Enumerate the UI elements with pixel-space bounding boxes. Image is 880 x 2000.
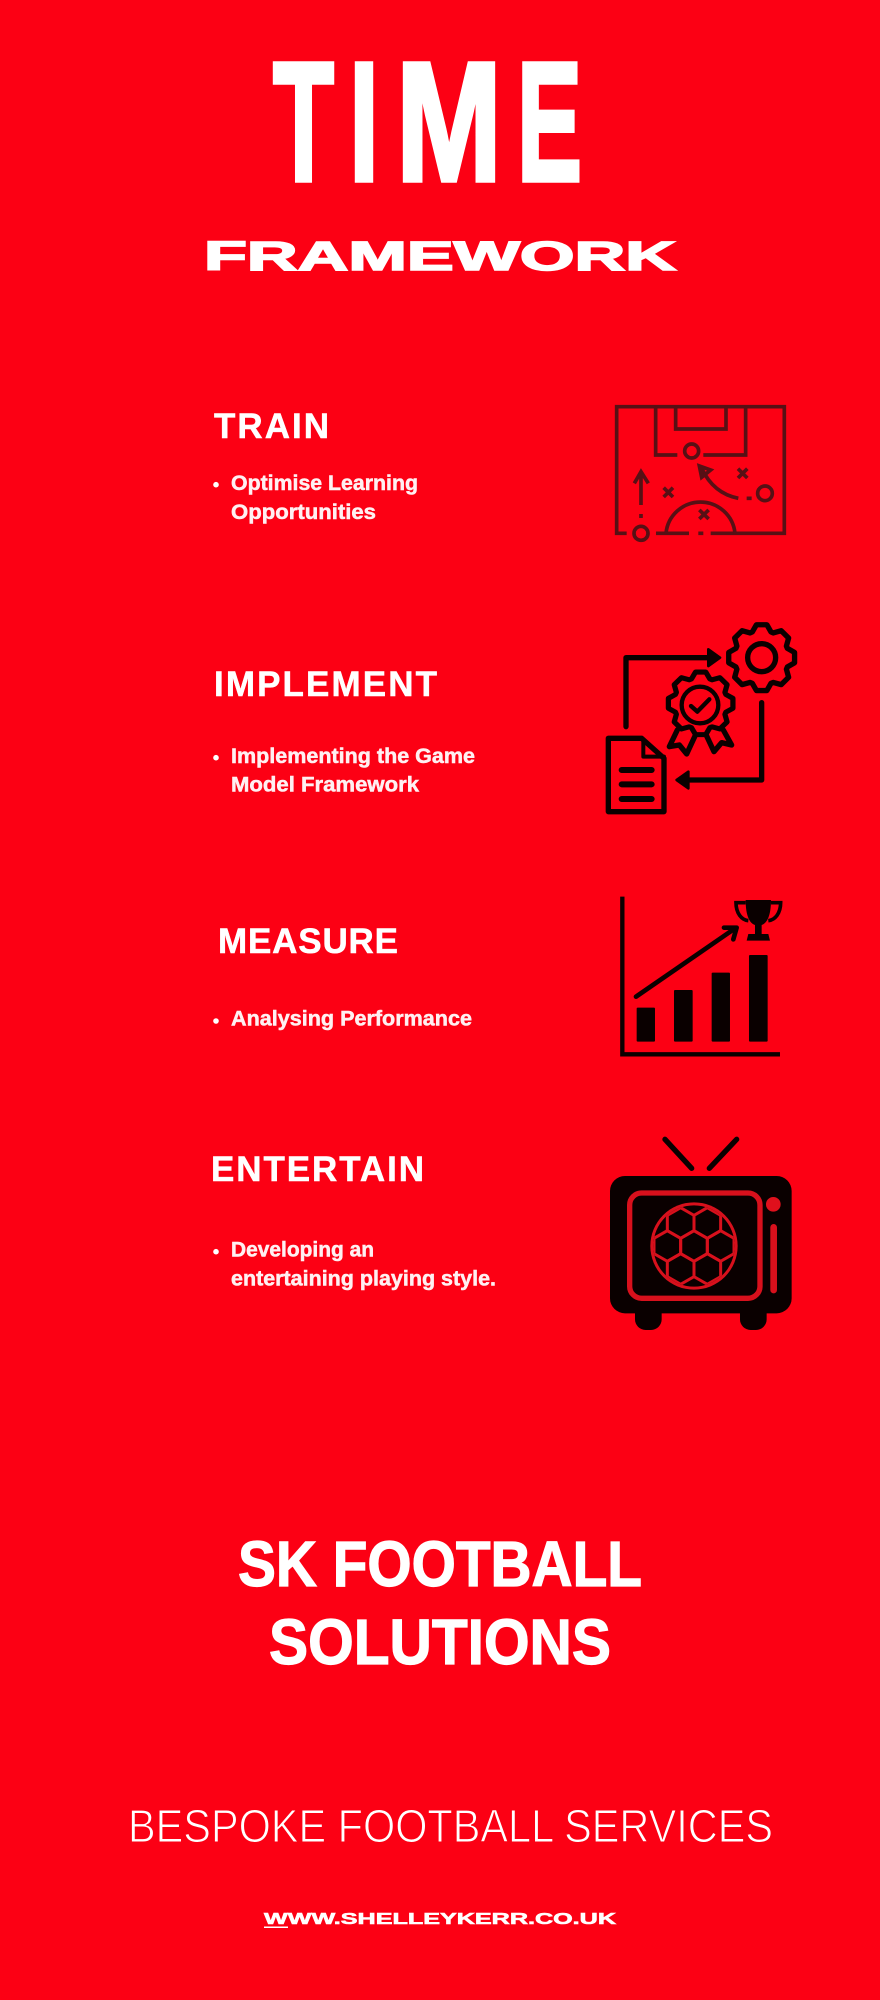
panel: measure (213, 897, 781, 1054)
title: M (396, 28, 502, 218)
bullet text: entertain: Developing an (231, 1239, 374, 1262)
panel: entertain (211, 1139, 792, 1330)
bullet text: entertain (213, 1239, 496, 1291)
heading: train: TRAIN (214, 407, 329, 446)
title: I (349, 28, 379, 218)
website: WWW.SHELLEYKERR.CO.UK (264, 1911, 617, 1928)
tagline: BESPOKE FOOTBALL SERVICES (128, 1800, 773, 1852)
bullet text: entertain: entertaining playing style. (231, 1268, 496, 1291)
bullet text: implement: Implementing the Game (231, 745, 475, 768)
bullet text: train: Opportunities (231, 501, 376, 524)
brand name: SOLUTIONS (269, 1606, 611, 1678)
bullet text: train (213, 472, 418, 524)
heading: implement: IMPLEMENT (214, 665, 437, 704)
brand name: SK FOOTBALL (238, 1528, 642, 1600)
icon: tactics pitch (617, 407, 784, 540)
heading: entertain: ENTERTAIN (211, 1150, 424, 1189)
bullet text: train: Optimise Learning (231, 472, 418, 495)
heading: measure: MEASURE (218, 922, 398, 961)
title: T (273, 28, 334, 218)
bullet text: implement (213, 745, 475, 797)
icon: television with football (610, 1139, 792, 1330)
title: E (517, 28, 582, 218)
panel: train (213, 407, 784, 540)
icon: bar chart with trophy (622, 897, 781, 1054)
icon: document, badge and gear cycle (608, 625, 795, 812)
subtitle: FRAMEWORK (204, 233, 677, 279)
brand name (238, 1528, 642, 1678)
panel: implement (213, 625, 795, 812)
bullet text: measure: Analysing Performance (231, 1008, 472, 1031)
bullet text: implement: Model Framework (231, 774, 419, 797)
